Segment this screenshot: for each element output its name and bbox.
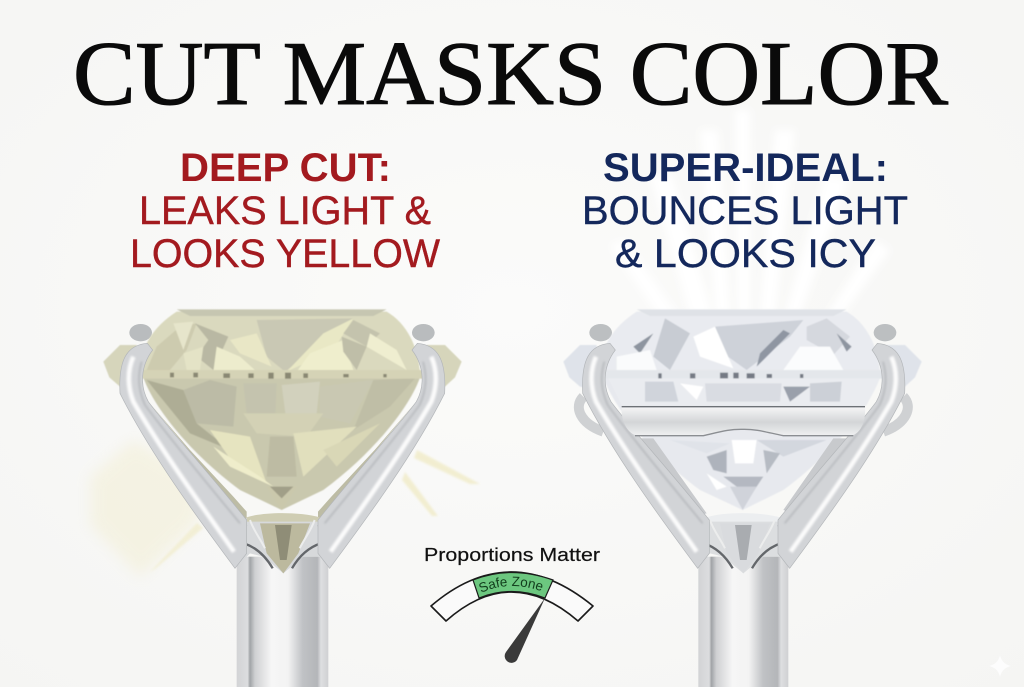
- sparkle mark: [989, 655, 1011, 677]
- gauge needle: [505, 598, 545, 663]
- heading: super-ideal: & LOOKS ICY: [615, 232, 876, 276]
- shank: [698, 557, 788, 687]
- heading: deep cut: LEAKS LIGHT &: [139, 189, 431, 233]
- gauge title: Proportions Matter: [424, 545, 600, 565]
- pavilion: [143, 377, 420, 510]
- heading: deep cut: LOOKS YELLOW: [130, 232, 440, 276]
- crown: [140, 312, 420, 373]
- basket: [697, 513, 788, 573]
- prongs: [582, 343, 905, 568]
- white light rays: [610, 110, 890, 318]
- crown: [600, 312, 880, 373]
- heading: super-ideal: [582, 146, 908, 276]
- leaking yellow light rays: [90, 440, 480, 577]
- girdle tips: [103, 345, 137, 390]
- heading: super-ideal: SUPER-IDEAL:: [603, 146, 888, 190]
- left ring: yellow deep-cut diamond: [103, 309, 462, 687]
- safe zone segment: [473, 572, 553, 598]
- gauge: proportions matter: [424, 545, 600, 663]
- safe zone label: Safe Zone: [479, 576, 542, 592]
- white diamond: [563, 309, 922, 510]
- title: CUT MASKS COLOR: [73, 23, 948, 124]
- horizontal bar: [622, 407, 865, 436]
- ring bar ends: [579, 397, 908, 432]
- basket: [237, 513, 328, 573]
- shank: [237, 557, 328, 687]
- basket rails: [635, 438, 707, 518]
- yellow diamond: [103, 309, 462, 510]
- heading: deep cut: DEEP CUT:: [180, 146, 391, 190]
- back prong knobs: [589, 324, 896, 341]
- right ring: white super-ideal diamond: [563, 309, 922, 687]
- gauge arc: [431, 572, 593, 621]
- heading: super-ideal: BOUNCES LIGHT: [582, 189, 908, 233]
- pavilion: [603, 377, 880, 510]
- side reflections: [148, 402, 247, 520]
- girdle band: [603, 370, 883, 379]
- lower crown reflection: [608, 378, 880, 405]
- girdle tips: [563, 345, 597, 390]
- heading: deep cut: [130, 146, 440, 276]
- back prong knobs: [129, 324, 435, 341]
- girdle band: [142, 370, 423, 379]
- prongs: [120, 343, 445, 568]
